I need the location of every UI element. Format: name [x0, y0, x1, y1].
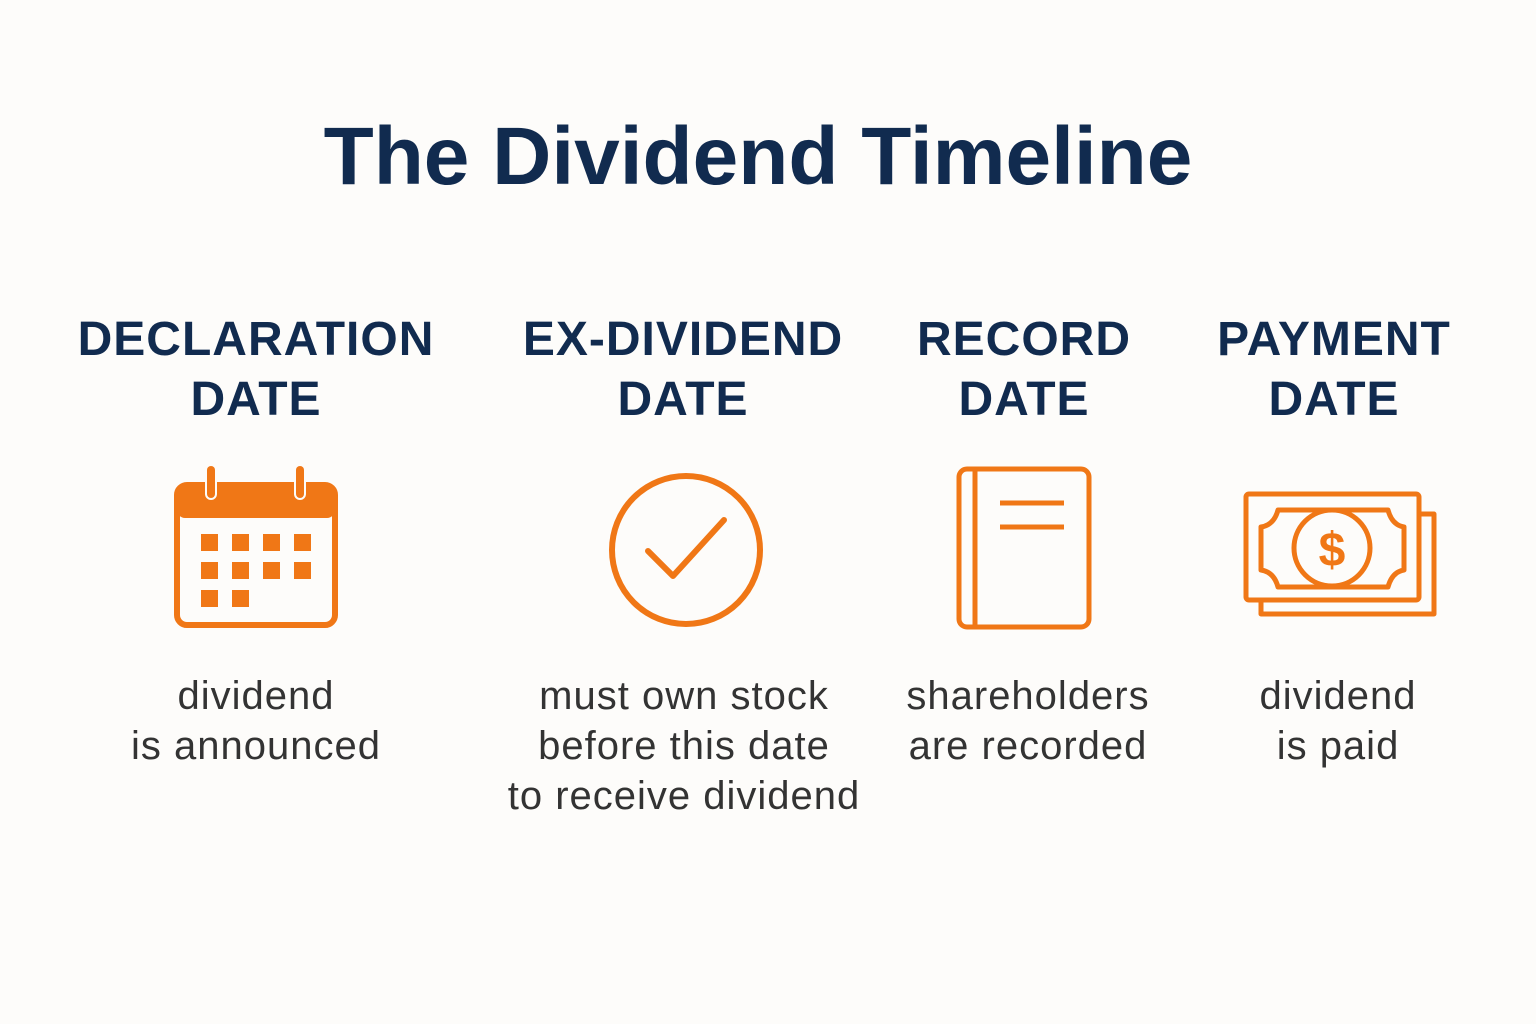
heading: record: DATE [958, 373, 1090, 426]
text: ex-dividend: must own stock [539, 674, 829, 718]
text: payment [1259, 674, 1416, 768]
heading: record: RECORD [917, 313, 1131, 366]
text: ex-dividend: to receive dividend [508, 774, 860, 818]
icon: check circle [612, 476, 760, 624]
heading: declaration [78, 313, 434, 426]
text: record [906, 674, 1150, 768]
text: ex-dividend: before this date [538, 724, 830, 768]
text: payment: is paid [1277, 724, 1399, 768]
icon: money [1246, 494, 1434, 614]
heading: payment: DATE [1268, 373, 1400, 426]
icon: calendar [177, 466, 335, 625]
heading: declaration: DECLARATION [78, 313, 434, 366]
icon: money: $ [1319, 524, 1346, 577]
heading: ex-dividend: EX-DIVIDEND [523, 313, 843, 366]
heading: ex-dividend: DATE [617, 373, 749, 426]
text: record: shareholders [906, 674, 1150, 718]
text: payment: dividend [1259, 674, 1416, 718]
text: declaration: dividend [177, 674, 334, 718]
icon: book [959, 469, 1089, 627]
text: ex-dividend [508, 674, 860, 818]
heading: declaration: DATE [190, 373, 322, 426]
text: record: are recorded [909, 724, 1147, 768]
text: declaration: is announced [131, 724, 381, 768]
heading: ex-dividend [523, 313, 843, 426]
text: declaration [131, 674, 381, 768]
heading: payment [1217, 313, 1451, 426]
title: The Dividend Timeline [324, 111, 1192, 202]
heading: record [917, 313, 1131, 426]
heading: payment: PAYMENT [1217, 313, 1451, 366]
